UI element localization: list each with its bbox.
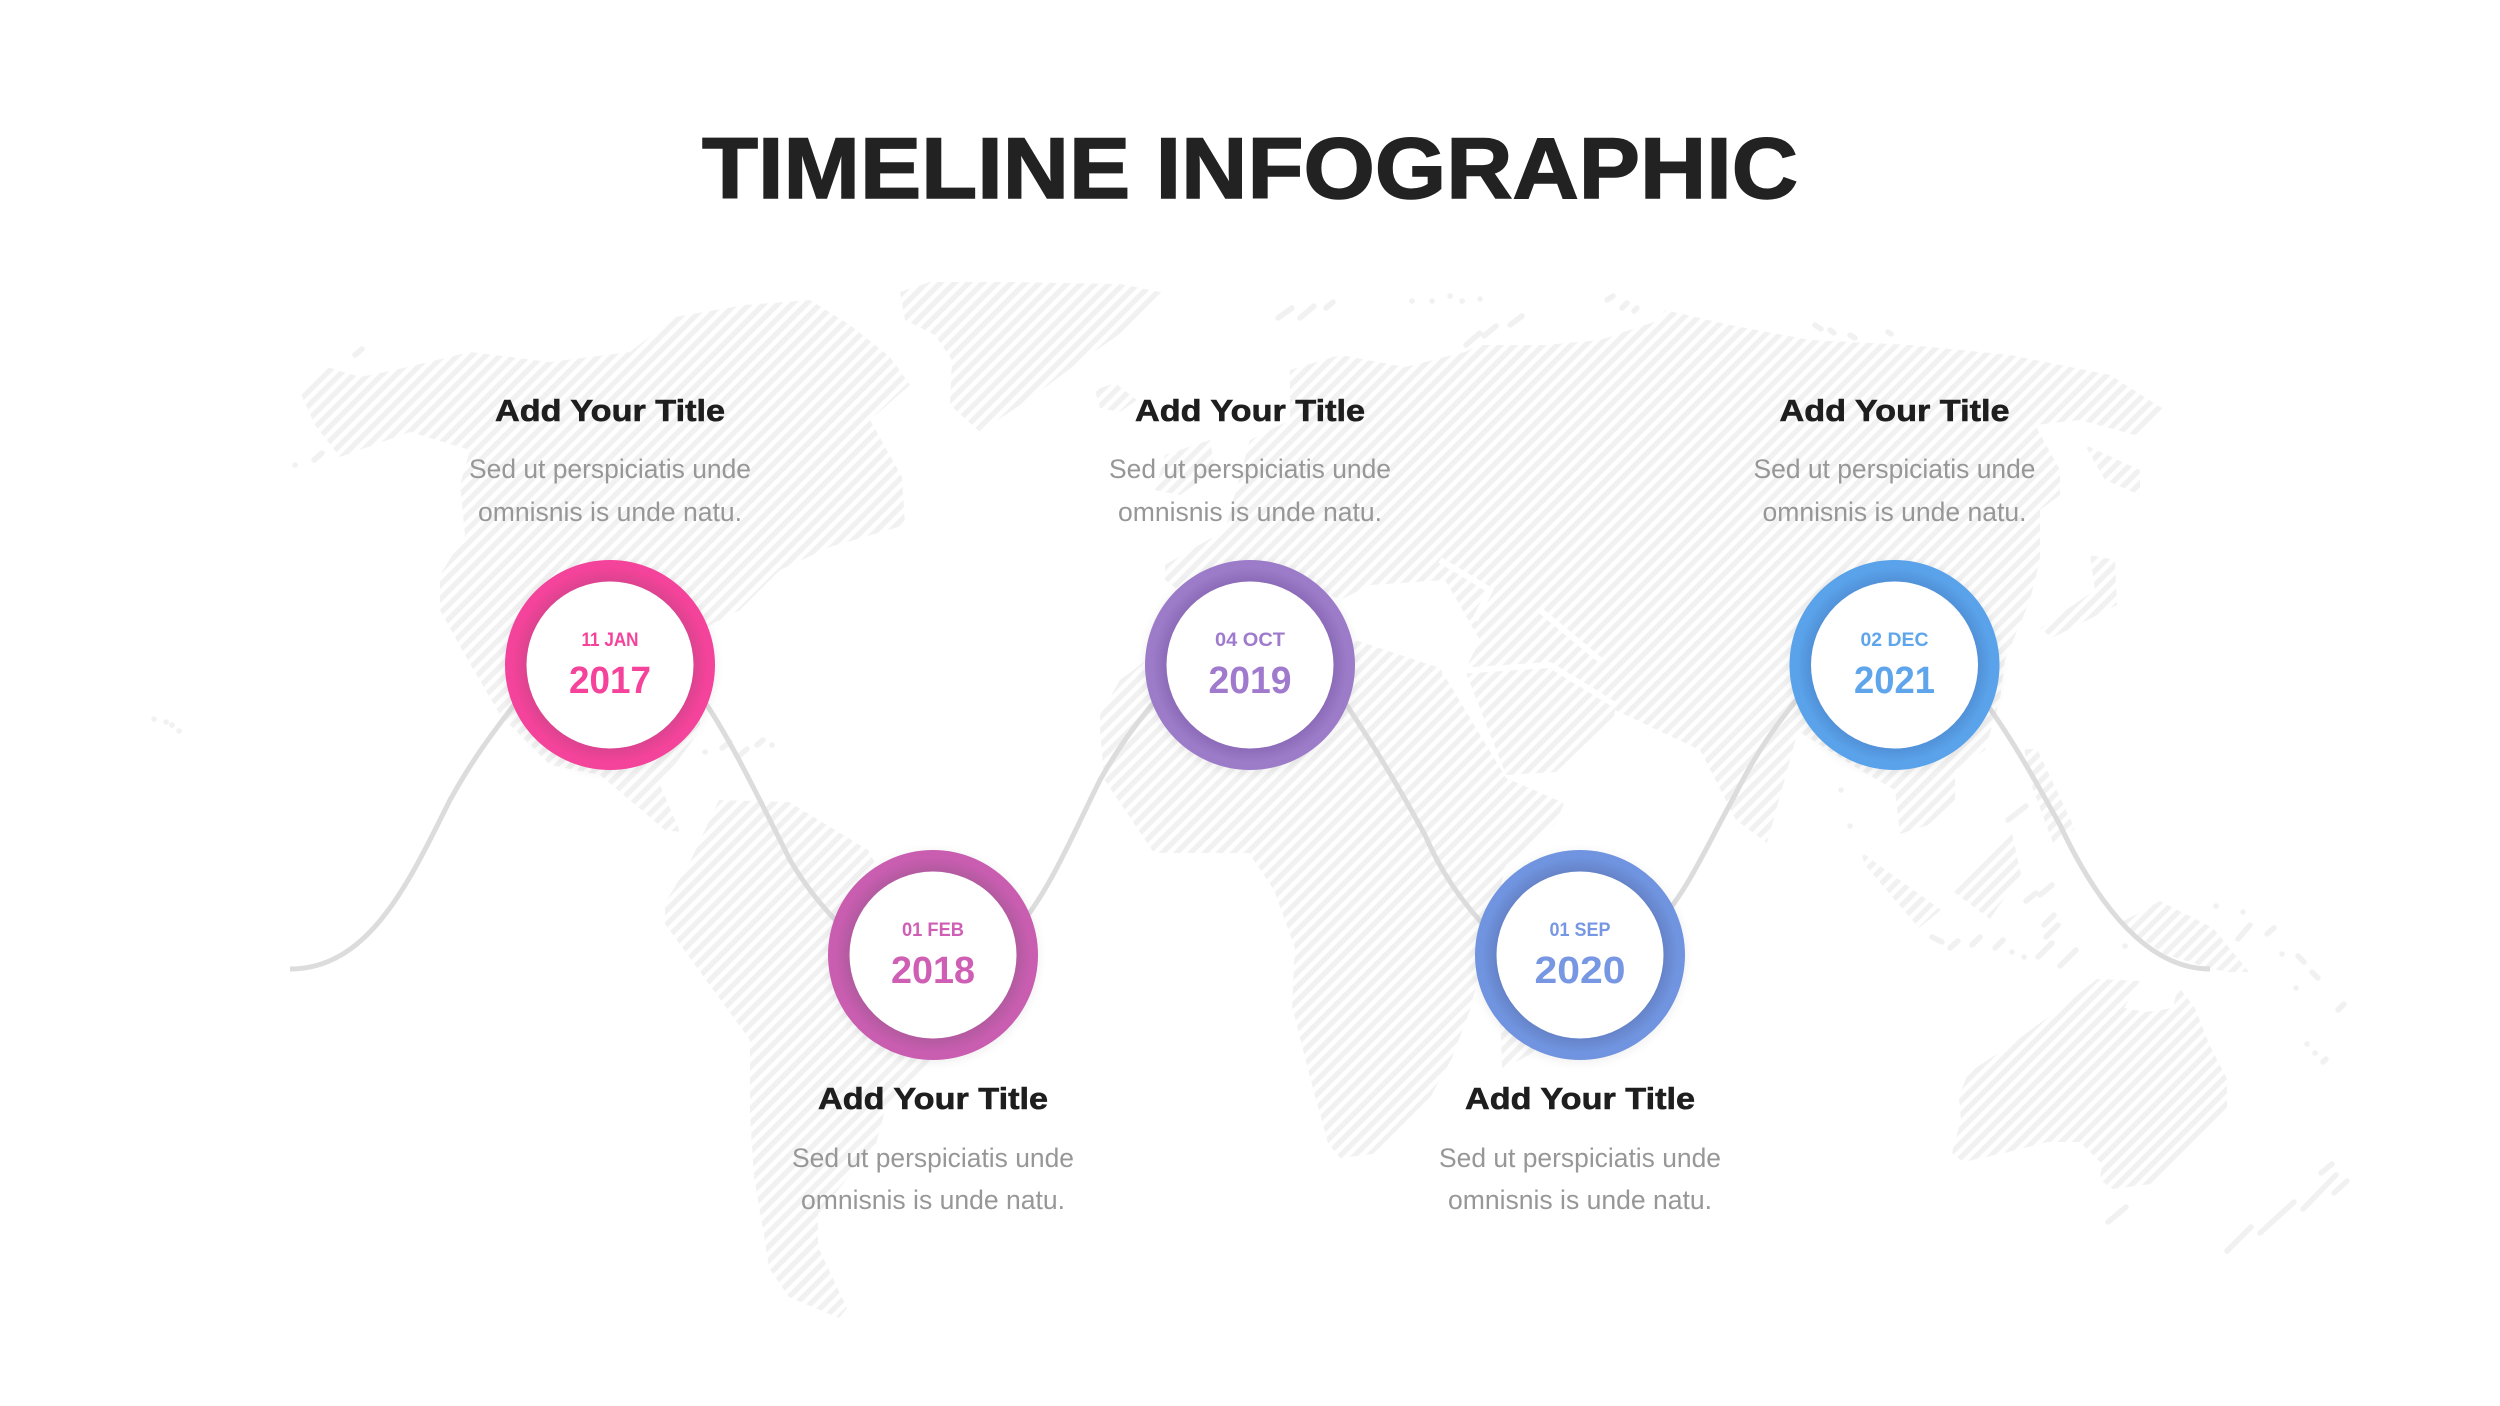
ring 2021 [1788, 560, 2000, 773]
map: sea gaps [1440, 560, 1615, 705]
ring 2020 [1474, 850, 1686, 1063]
year 2019: 2019 [1208, 660, 1292, 702]
description 2018: omnisnis is unde natu. [801, 1185, 1065, 1215]
heading 2020: Add Your Title [1465, 1081, 1695, 1116]
year 2021: 2021 [1854, 660, 1935, 702]
description 2021: omnisnis is unde natu. [1762, 497, 2026, 527]
map: landmasses [300, 282, 2249, 1318]
description 2017 [469, 454, 751, 527]
date 2021: 02 DEC [1860, 630, 1929, 651]
year 2020: 2020 [1534, 950, 1626, 992]
ring 2019 [1144, 560, 1356, 773]
year 2017: 2017 [569, 660, 651, 702]
description 2017: Sed ut perspiciatis unde [469, 454, 751, 484]
description 2017: omnisnis is unde natu. [478, 497, 742, 527]
description 2018 [792, 1143, 1074, 1215]
ring 2017 [504, 560, 716, 773]
ring 2018 [827, 850, 1039, 1063]
description 2021 [1754, 454, 2036, 527]
milestone 2019 [1109, 393, 1391, 773]
milestone 2020 [1439, 850, 1721, 1215]
description 2020: Sed ut perspiciatis unde [1439, 1143, 1721, 1173]
timeline curve [290, 690, 2210, 969]
date 2019: 04 OCT [1215, 630, 1285, 651]
title: TIMELINE INFOGRAPHIC [702, 121, 1798, 217]
heading 2019: Add Your Title [1135, 393, 1365, 428]
milestone 2021 [1754, 393, 2036, 773]
date 2018: 01 FEB [902, 920, 964, 941]
description 2019 [1109, 454, 1391, 527]
milestone 2017 [469, 393, 751, 773]
description 2021: Sed ut perspiciatis unde [1754, 454, 2036, 484]
heading 2018: Add Your Title [818, 1081, 1048, 1116]
heading 2017: Add Your Title [495, 393, 725, 428]
date 2017: 11 JAN [582, 630, 638, 651]
description 2018: Sed ut perspiciatis unde [792, 1143, 1074, 1173]
description 2019: omnisnis is unde natu. [1118, 497, 1382, 527]
date 2020: 01 SEP [1550, 920, 1611, 941]
map: small islands [154, 296, 2347, 1251]
world map background [154, 282, 2347, 1318]
milestone 2018 [792, 850, 1074, 1215]
description 2019: Sed ut perspiciatis unde [1109, 454, 1391, 484]
heading 2021: Add Your Title [1780, 393, 2010, 428]
year 2018: 2018 [891, 950, 975, 992]
description 2020 [1439, 1143, 1721, 1215]
description 2020: omnisnis is unde natu. [1448, 1185, 1712, 1215]
